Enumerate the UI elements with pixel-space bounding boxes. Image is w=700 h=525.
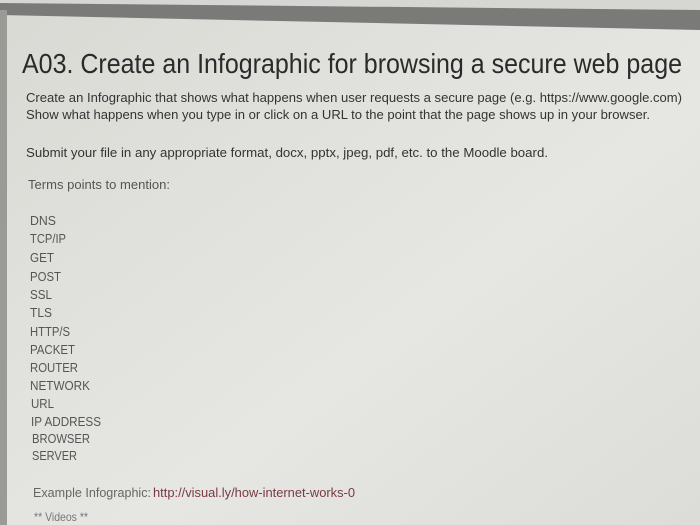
example link line: Example Infographic: <box>33 486 151 500</box>
left dark edge <box>0 10 7 525</box>
terms list: URL <box>31 396 54 411</box>
terms list: HTTP/S <box>30 324 70 339</box>
example link line: http://visual.ly/how-internet-works-0 <box>153 486 355 500</box>
description text: Create an Infographic that shows what happens when user requests a secure page (e.g. https://www.google.com) <box>26 90 682 105</box>
terms list: IP ADDRESS <box>31 414 101 429</box>
terms list: PACKET <box>30 342 75 357</box>
videos: ** Videos ** <box>34 510 88 524</box>
terms list: SERVER <box>32 448 77 463</box>
example link line <box>33 486 355 500</box>
terms list: TCP/IP <box>30 231 66 246</box>
description text: Terms points to mention: <box>28 177 170 192</box>
terms list: GET <box>30 250 54 265</box>
terms list: NETWORK <box>30 378 90 393</box>
description text: Show what happens when you type in or click on a URL to the point that the page shows up in your browser. <box>26 107 650 122</box>
terms list: TLS <box>30 305 52 320</box>
terms list: BROWSER <box>32 431 90 446</box>
description text: Submit your file in any appropriate format, docx, pptx, jpeg, pdf, etc. to the Moodle board. <box>26 145 548 160</box>
terms list: POST <box>30 269 61 284</box>
terms list: ROUTER <box>30 360 78 375</box>
description text <box>26 90 682 192</box>
terms list: DNS <box>30 213 56 228</box>
top dark bezel band <box>0 0 700 30</box>
terms list: SSL <box>30 287 52 302</box>
terms list <box>30 213 101 463</box>
